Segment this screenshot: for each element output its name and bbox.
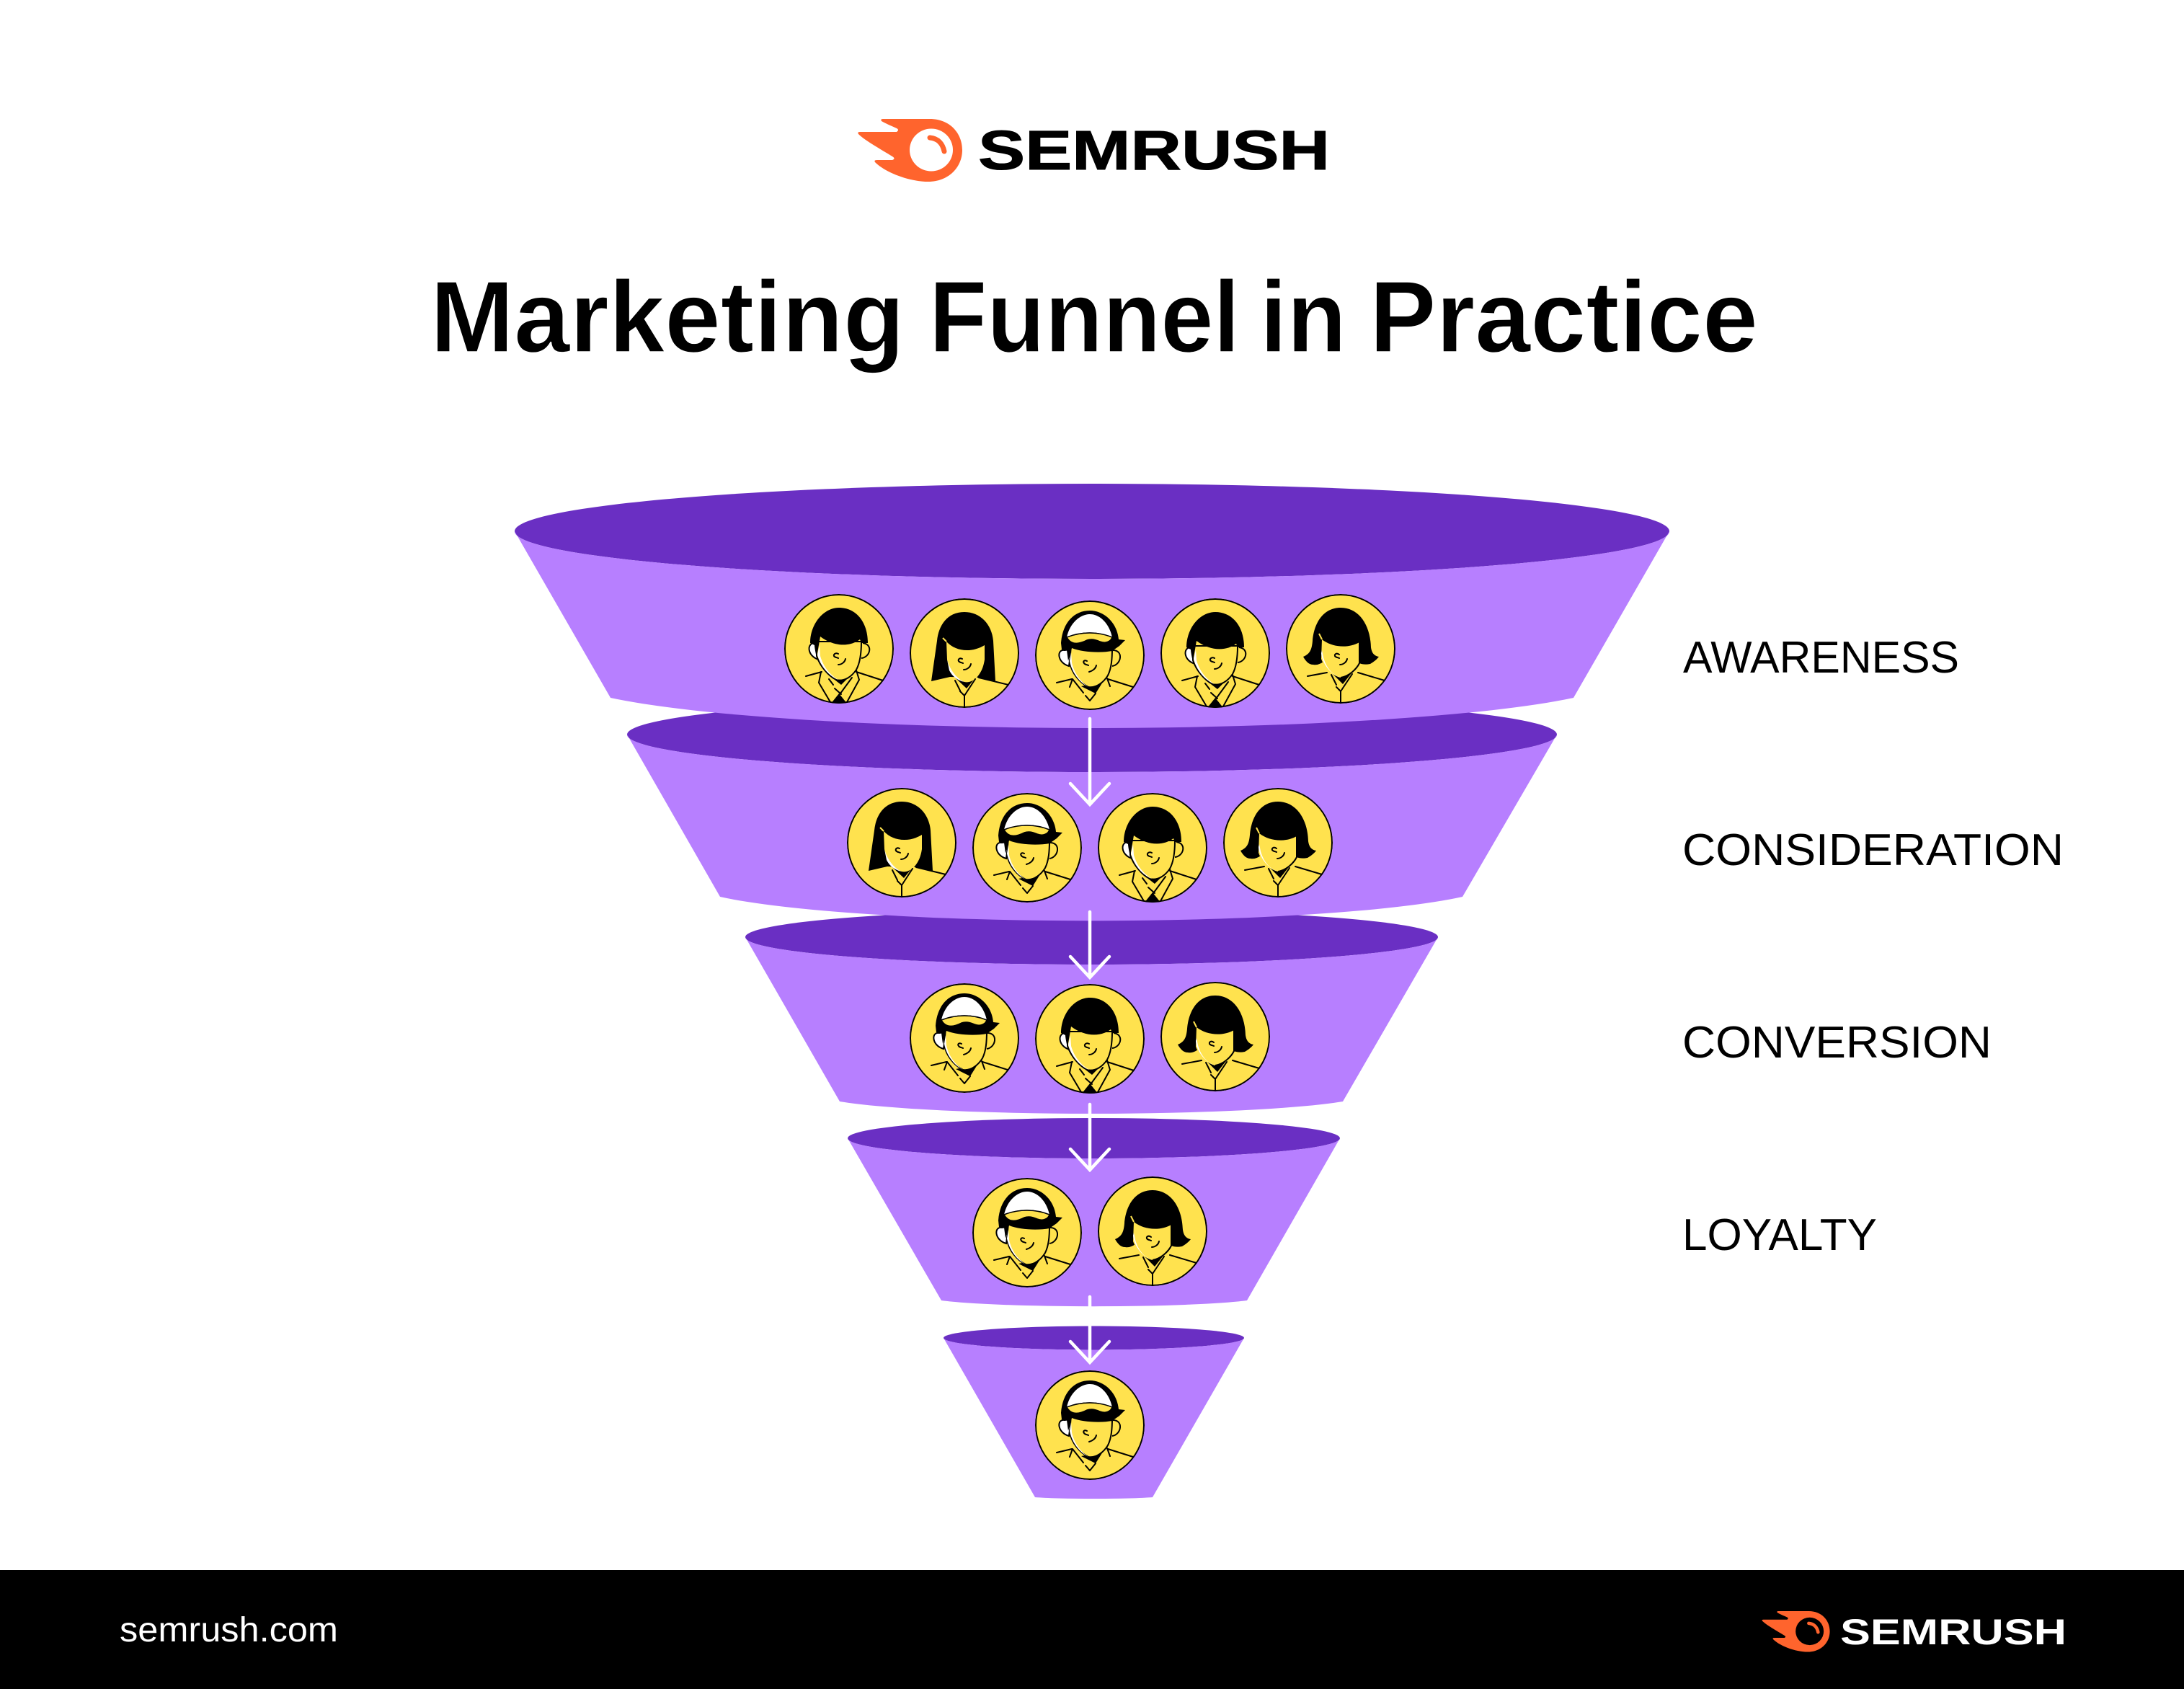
title: Funnel bbox=[929, 260, 1240, 373]
title: Marketing bbox=[430, 260, 905, 373]
people row bbox=[847, 788, 1333, 903]
footer bar bbox=[0, 1570, 2184, 1689]
funnel stage 5: final bbox=[944, 1326, 1244, 1499]
funnel stage 1: awareness bbox=[515, 484, 1669, 728]
label: conversion: CONVERSION bbox=[1682, 1018, 1992, 1068]
label: loyalty: LOYALTY bbox=[1682, 1210, 1877, 1260]
people row bbox=[972, 1176, 1207, 1287]
arrow: loyalty to final bbox=[1070, 1297, 1109, 1362]
icon: footer comet bbox=[1762, 1611, 1830, 1652]
footer wordmark: SEMRUSH bbox=[1840, 1612, 2067, 1652]
icon: semrush comet bbox=[858, 119, 962, 182]
header logo bbox=[858, 119, 1330, 182]
funnel stage 2: consideration bbox=[627, 697, 1557, 921]
funnel diagram bbox=[515, 484, 1669, 1499]
arrow: consideration to conversion bbox=[1070, 912, 1109, 978]
people row bbox=[910, 982, 1270, 1094]
logo wordmark: SEMRUSH bbox=[978, 120, 1330, 182]
label: consideration: CONSIDERATION bbox=[1682, 825, 2064, 875]
label: awareness: AWARENESS bbox=[1683, 633, 1959, 683]
footer url: semrush.com bbox=[120, 1611, 338, 1649]
funnel stage 4: loyalty bbox=[848, 1118, 1340, 1306]
funnel stage 3: conversion bbox=[745, 910, 1438, 1114]
arrow: conversion to loyalty bbox=[1070, 1104, 1109, 1170]
title: in bbox=[1260, 260, 1346, 373]
person: cap man bbox=[1035, 1370, 1145, 1480]
arrow: awareness to consideration bbox=[1070, 719, 1109, 804]
title: Practice bbox=[1370, 260, 1758, 373]
people row bbox=[784, 594, 1395, 710]
footer logo bbox=[1762, 1611, 2067, 1652]
